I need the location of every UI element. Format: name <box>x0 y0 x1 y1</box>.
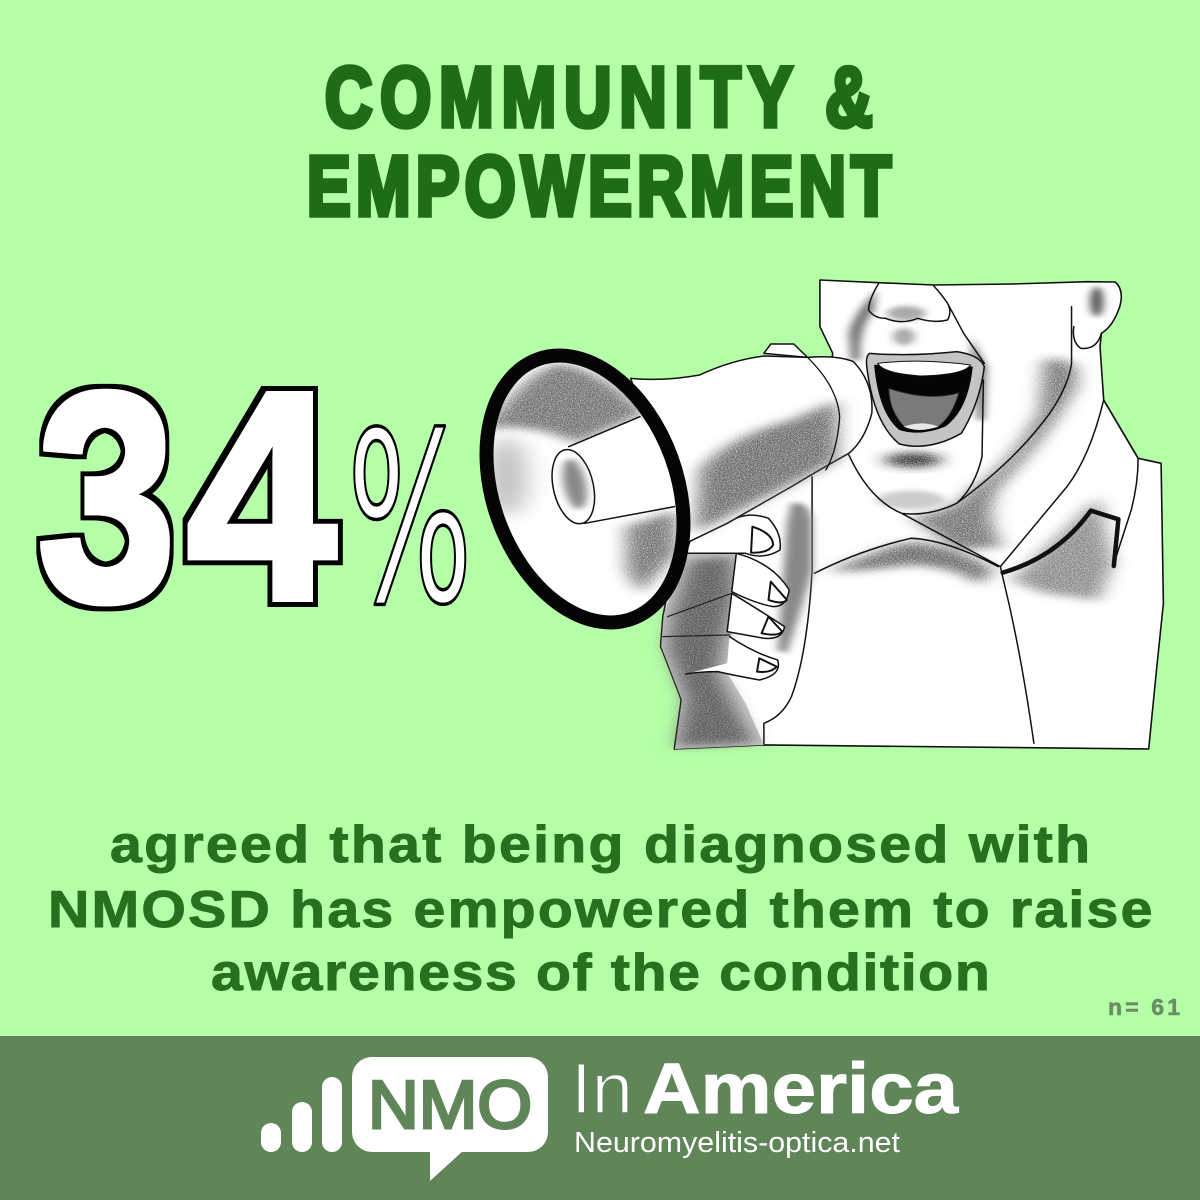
description text <box>48 815 1152 1001</box>
title: COMMUNITY & <box>325 50 873 144</box>
title <box>307 50 891 233</box>
statistic: 34% <box>37 330 473 664</box>
figure: head, neck and torso <box>661 280 1163 749</box>
megaphone body <box>631 344 872 543</box>
illustration: person shouting into megaphone <box>451 280 1163 749</box>
title: EMPOWERMENT <box>307 139 891 233</box>
statistic: 34%: 3 <box>37 331 176 664</box>
wordmark <box>571 1050 959 1159</box>
statistic: 34%: % <box>347 383 473 658</box>
description text: agreed that being diagnosed with <box>110 815 1090 873</box>
wordmark: America <box>643 1050 959 1129</box>
sample size note: n= 61 <box>1108 994 1180 1020</box>
icon: signal bars <box>261 1077 342 1152</box>
logo: NMO In America <box>261 1050 959 1181</box>
description text: awareness of the condition <box>211 943 990 1001</box>
wordmark: Neuromyelitis-optica.net <box>574 1127 900 1159</box>
icon: speech bubble with NMO <box>352 1057 548 1181</box>
statistic: 34%: 4 <box>186 330 339 663</box>
megaphone bell interior <box>494 362 676 616</box>
hand gripping handle <box>661 503 812 749</box>
description text: NMOSD has empowered them to raise <box>48 880 1152 938</box>
icon: speech bubble with NMO: NMO <box>368 1067 532 1143</box>
megaphone rim <box>451 328 719 650</box>
mouth <box>866 352 984 446</box>
footer band <box>0 1036 1200 1200</box>
wordmark: In <box>571 1050 633 1129</box>
